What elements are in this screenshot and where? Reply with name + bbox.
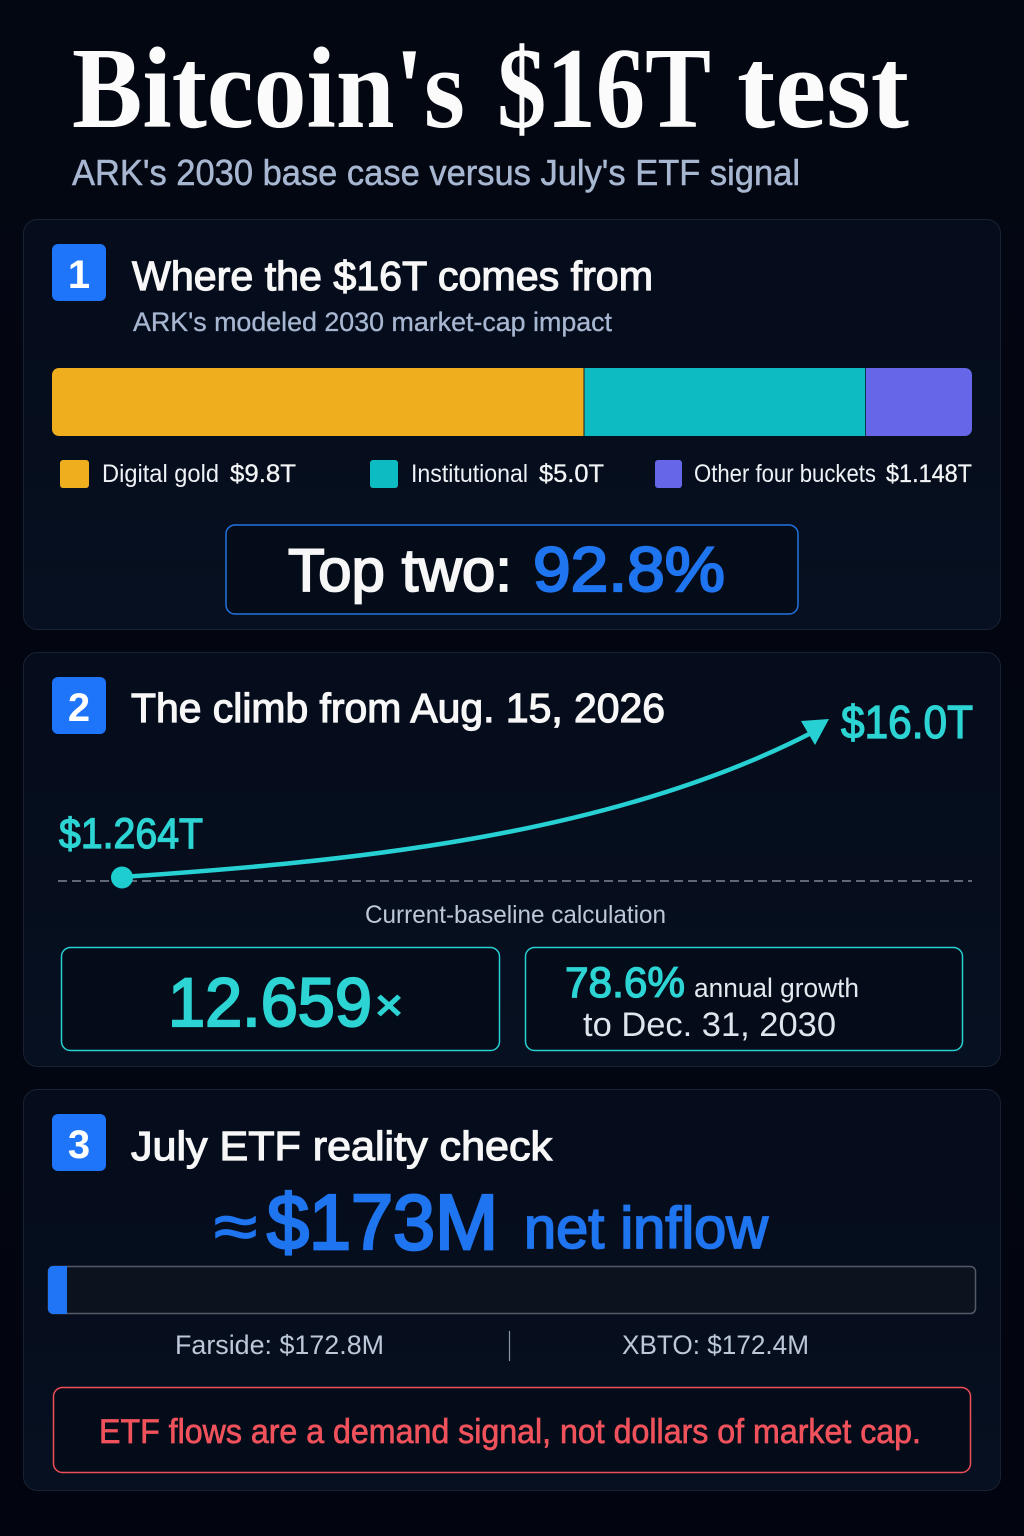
stat: annual growth [526, 948, 962, 1050]
progress bar [48, 1266, 976, 1314]
heading: section 2: The climb from Aug. 15, 2026 [131, 685, 665, 731]
badge: 1: 1 [68, 253, 90, 297]
title: test [737, 25, 909, 153]
subheading: section 1: ARK's modeled 2030 market-cap impact [133, 307, 612, 337]
badge: 1 [52, 244, 106, 301]
title: $16T [497, 25, 711, 153]
stat: multiple [62, 948, 500, 1050]
panel: the climb [24, 652, 1000, 1066]
legend: digital gold: $9.8T [230, 460, 296, 488]
legend: other four buckets: $1.148T [886, 460, 972, 488]
callout: top two: Top two: [288, 537, 512, 604]
callout: warning: ETF flows are a demand signal, not dollars of market cap. [99, 1413, 921, 1451]
big stat: net inflow: net inflow [524, 1196, 769, 1261]
stat: multiple: 12.659 [168, 964, 372, 1041]
callout: top two: 92.8% [533, 535, 725, 605]
badge: 2 [52, 677, 106, 734]
legend: other four buckets [655, 460, 972, 488]
callout: warning [54, 1388, 970, 1472]
source: Farside: Farside: $172.8M [175, 1330, 384, 1360]
legend: other four buckets: Other four buckets [694, 460, 876, 488]
source: XBTO: XBTO: $172.4M [622, 1330, 809, 1360]
heading: section 1: Where the $16T comes from [132, 253, 653, 299]
legend: digital gold [60, 460, 296, 488]
callout: top two [226, 525, 798, 614]
stacked bar [52, 368, 972, 436]
label: start value: $1.264T [59, 810, 203, 858]
title [72, 25, 909, 153]
legend: institutional [370, 460, 604, 488]
legend: institutional: $5.0T [539, 460, 604, 488]
stat: multiple: × [375, 981, 403, 1030]
stat: annual growth: to Dec. 31, 2030 [583, 1006, 836, 1044]
caption: baseline: Current-baseline calculation [365, 901, 666, 929]
badge: 3: 3 [68, 1123, 90, 1167]
big stat: net inflow: $173M [267, 1178, 498, 1266]
title: Bitcoin's [72, 25, 465, 153]
subtitle: ARK's 2030 base case versus July's ETF signal [72, 152, 800, 193]
chart: growth curve [58, 696, 973, 888]
heading: section 3: July ETF reality check [131, 1123, 553, 1169]
stat: annual growth: 78.6% [565, 959, 685, 1007]
legend: institutional: Institutional [411, 460, 528, 488]
panel: where the $16T comes from [24, 220, 1000, 630]
badge: 2: 2 [68, 686, 90, 730]
stat: annual growth: annual growth [694, 973, 859, 1003]
label: end value: $16.0T [841, 696, 973, 748]
panel: July ETF reality check [24, 1090, 1000, 1490]
badge: 3 [52, 1114, 106, 1171]
big stat: net inflow: ≈ [214, 1189, 257, 1263]
big stat: net inflow [214, 1178, 769, 1266]
legend: digital gold: Digital gold [102, 460, 219, 488]
